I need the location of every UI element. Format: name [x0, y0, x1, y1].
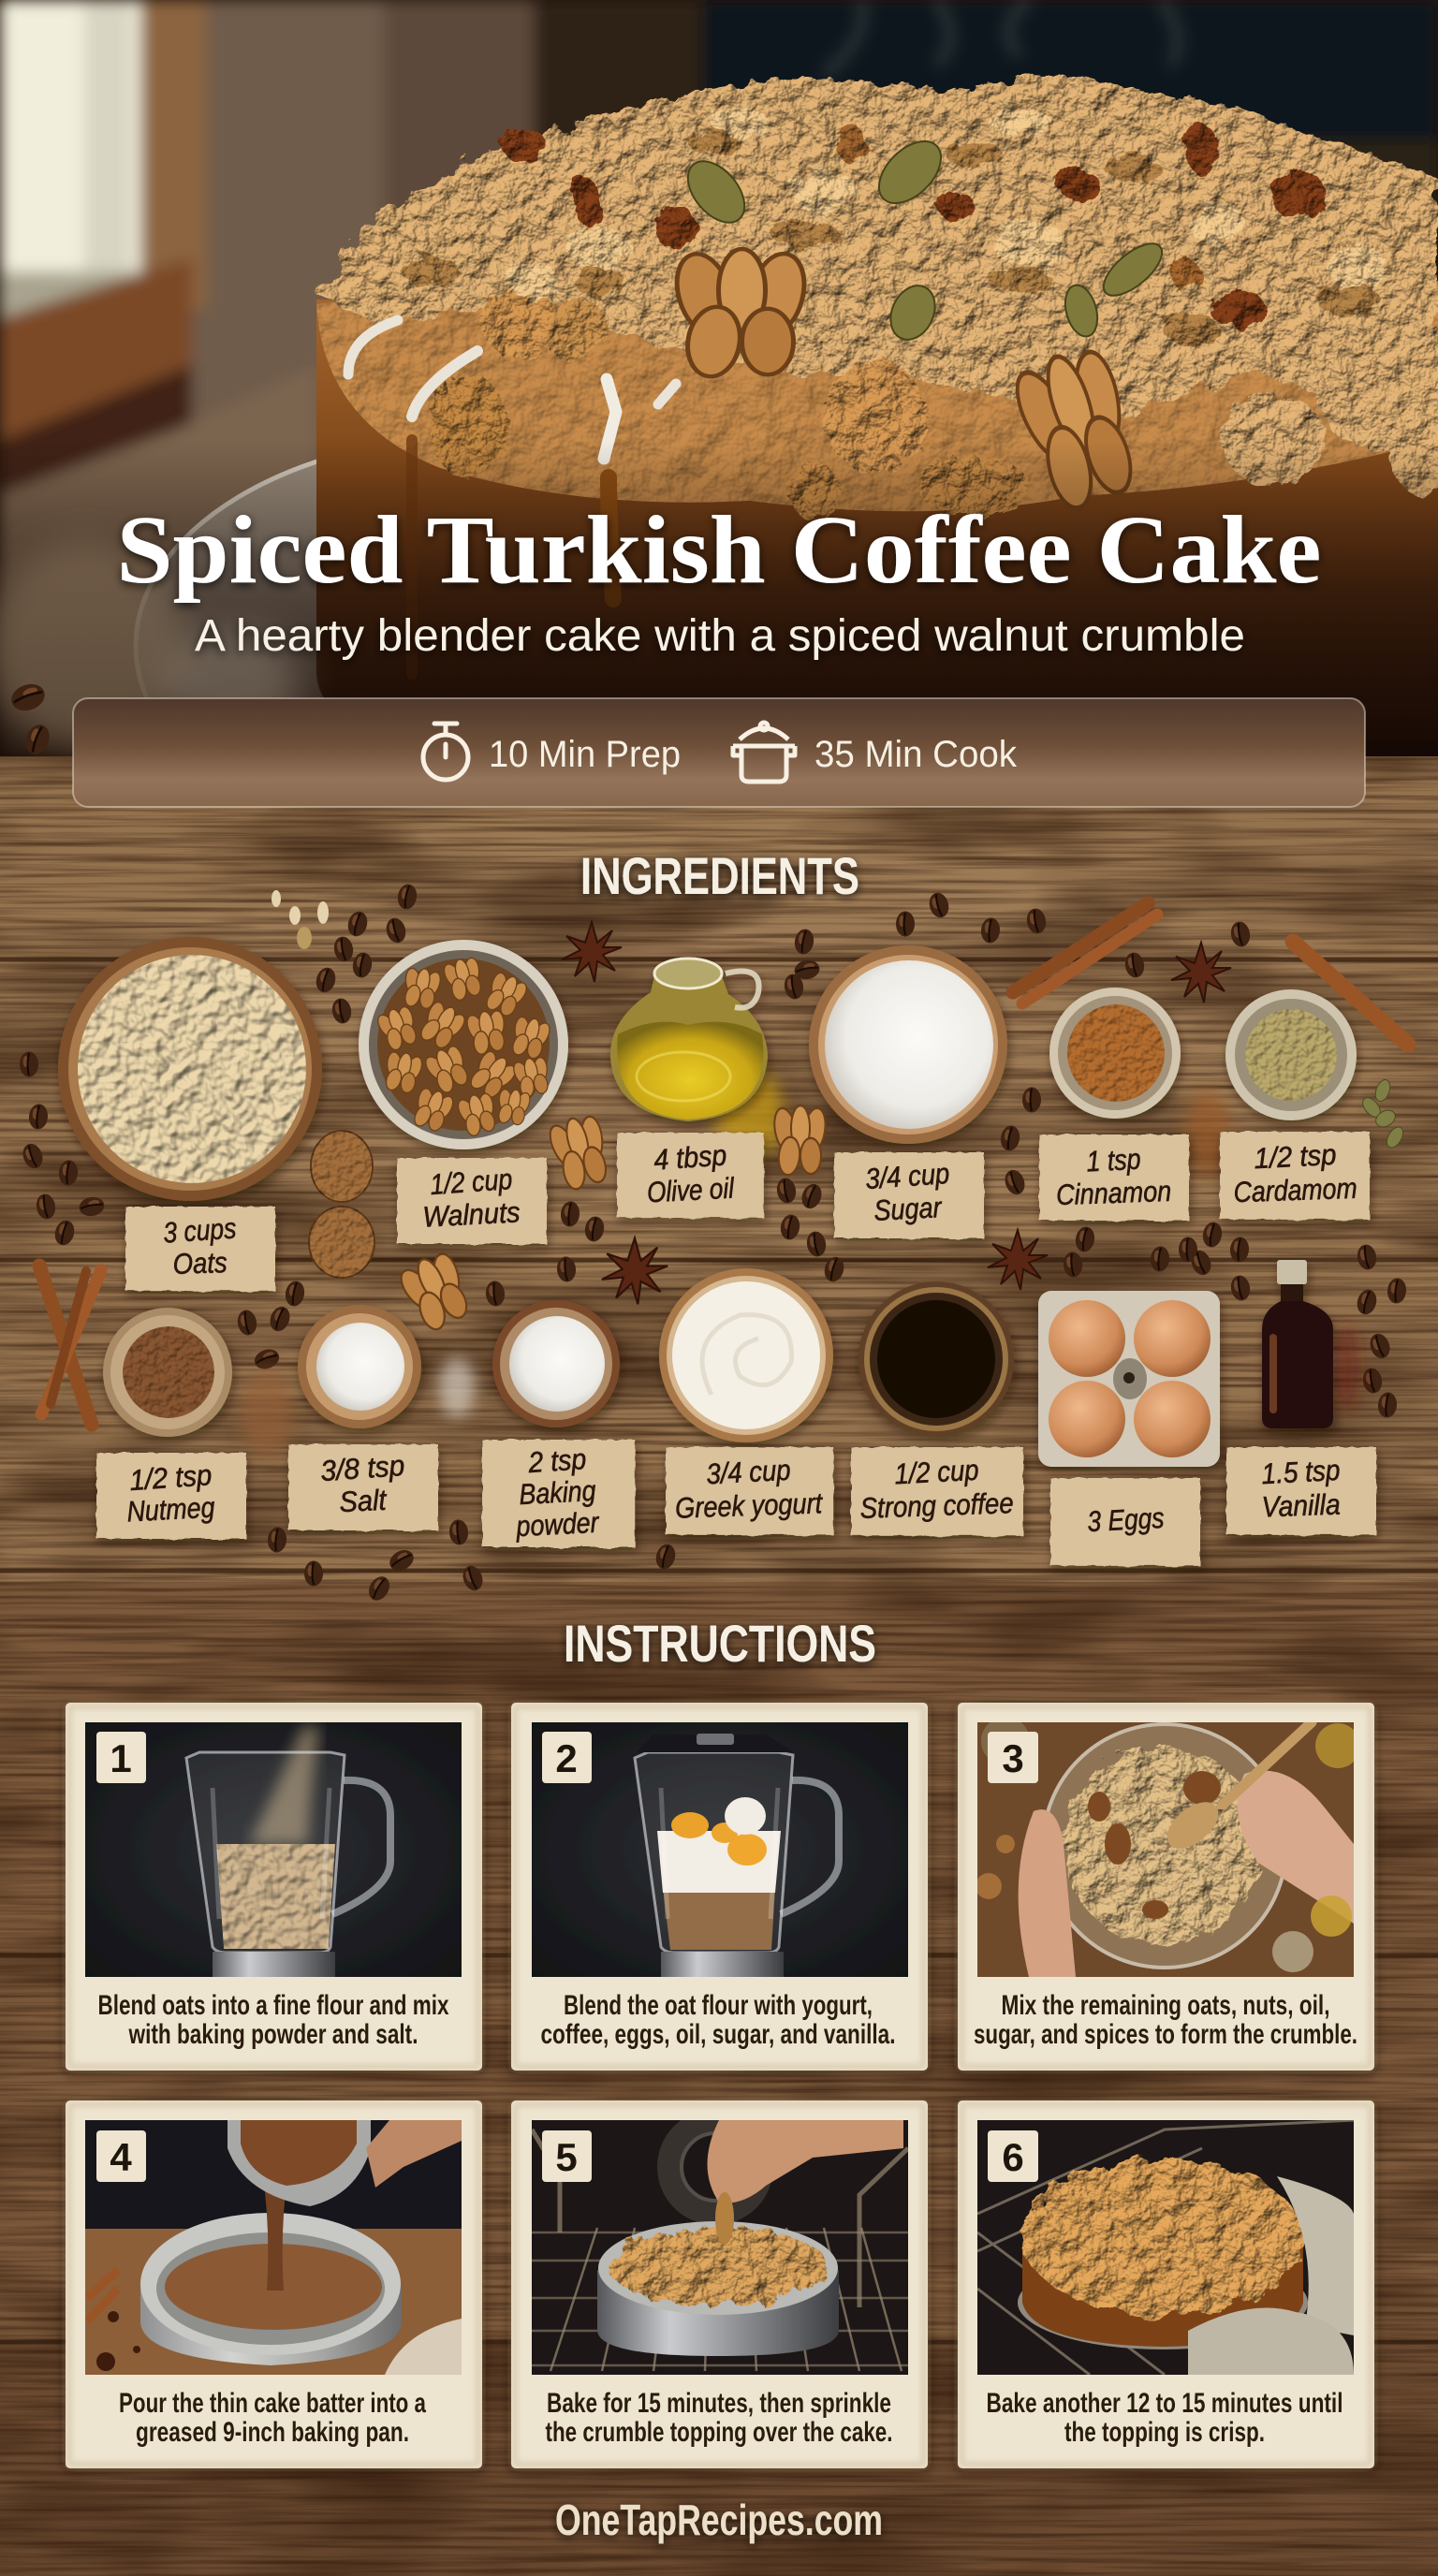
step 3 text: [974, 1990, 1357, 2050]
coffee beans on table: [7, 680, 53, 757]
cook time: 35 Min Cook: [814, 734, 1018, 775]
label: olive oil: 4 tbsp: [653, 1138, 727, 1177]
step 3 text: Mix the remaining oats, nuts, oil,: [1002, 1990, 1329, 2021]
whole walnuts: [309, 1131, 374, 1278]
step 5 text: [545, 2388, 893, 2448]
step 4 text: greased 9-inch baking pan.: [136, 2417, 409, 2448]
step 6 photo: finished cake from oven: [977, 2120, 1354, 2375]
label: cardamom: Cardamom: [1233, 1172, 1357, 1208]
bowl: oats: [58, 937, 322, 1201]
step 4 photo: pouring batter into pan: [85, 2120, 462, 2375]
step 6 text: the topping is crisp.: [1064, 2417, 1265, 2448]
label: walnuts: Walnuts: [422, 1195, 521, 1234]
label: 3 cups oats: [125, 1207, 275, 1291]
hero photo: spiced coffee cake: [0, 0, 1438, 756]
label: 3 cups oats: 3 cups: [162, 1211, 237, 1250]
label: greek yogurt: Greek yogurt: [675, 1486, 824, 1525]
step 1 badge: [96, 1732, 146, 1783]
label: sugar: [834, 1152, 984, 1238]
step 1 text: [97, 1990, 449, 2050]
step 2 text: [541, 1990, 895, 2050]
label: walnuts: [397, 1158, 547, 1244]
label: vanilla: [1226, 1447, 1376, 1535]
bottle: vanilla: [1262, 1260, 1333, 1428]
step 4 text: Pour the thin cake batter into a: [119, 2388, 426, 2419]
label: cinnamon: 1 tsp: [1086, 1143, 1141, 1178]
label: walnuts: 1/2 cup: [429, 1163, 513, 1201]
step 3 photo: mixing crumble in bowl: [977, 1722, 1354, 1977]
step 2 badge: 2: [555, 1736, 578, 1780]
plate: [133, 459, 324, 698]
label: baking powder: Baking: [519, 1474, 596, 1511]
step card 6: [958, 2100, 1374, 2468]
label: nutmeg: [96, 1453, 246, 1539]
label: salt: [288, 1444, 438, 1530]
steam: [824, 0, 1178, 75]
step 5 photo: sprinkling crumble in oven: [532, 2120, 908, 2375]
step 2 photo: wet ingredients in blender: [532, 1722, 908, 1977]
bowl: baking powder: [492, 1300, 620, 1427]
step 6 badge: [988, 2130, 1038, 2182]
cardamom pods: [677, 130, 1170, 346]
subtitle: A hearty blender cake with a spiced walnut crumble: [195, 611, 1245, 661]
table light: [0, 543, 300, 749]
icon: stopwatch: [423, 724, 468, 780]
label: baking powder: [482, 1440, 635, 1547]
step card 3: [958, 1703, 1374, 2071]
walnut pieces: [392, 1105, 829, 1338]
star anise: [562, 922, 1231, 1304]
label: cinnamon: Cinnamon: [1056, 1175, 1172, 1211]
step 1 badge: 1: [110, 1736, 132, 1780]
timing panel: [73, 698, 1365, 807]
step 2 badge: [542, 1732, 592, 1783]
step 1 photo: oats in blender: [85, 1722, 462, 1977]
crumble topping: [316, 71, 1438, 520]
step 4 text: [119, 2388, 426, 2448]
step 4 badge: 4: [110, 2135, 132, 2179]
bowl: salt: [298, 1305, 421, 1428]
label: sugar: 3/4 cup: [864, 1157, 950, 1195]
label: baking powder: 2 tsp: [526, 1442, 587, 1479]
step 1 text: Blend oats into a fine flour and mix: [97, 1990, 449, 2021]
label: strong coffee: 1/2 cup: [894, 1454, 979, 1490]
label: baking powder: powder: [515, 1506, 601, 1543]
step 2 text: Blend the oat flour with yogurt,: [564, 1990, 873, 2021]
cinnamon sticks: [39, 903, 1408, 1425]
bowl: sugar: [809, 945, 1007, 1144]
bowl: cinnamon: [1049, 988, 1181, 1119]
label: olive oil: [617, 1133, 764, 1218]
step 6 text: [987, 2388, 1343, 2448]
label: strong coffee: [851, 1447, 1023, 1536]
label: salt: 3/8 tsp: [319, 1449, 405, 1487]
footer brand: OneTapRecipes.com: [555, 2496, 883, 2544]
walnut halves on cake: [668, 249, 1154, 520]
title: Spiced Turkish Coffee Cake: [116, 496, 1322, 604]
label: strong coffee: Strong coffee: [859, 1486, 1014, 1525]
step card 5: [511, 2100, 928, 2468]
bowl: cardamom: [1225, 989, 1357, 1120]
step 6 badge: 6: [1002, 2135, 1024, 2179]
step card 4: [66, 2100, 482, 2468]
step 5 badge: [542, 2130, 592, 2182]
label: 3 cups oats: Oats: [172, 1246, 227, 1281]
heading: instructions: INSTRUCTIONS: [564, 1614, 876, 1673]
label: vanilla: 1.5 tsp: [1261, 1454, 1341, 1490]
tray: eggs: [1038, 1291, 1220, 1467]
label: cardamom: [1220, 1132, 1370, 1220]
prep time: 10 Min Prep: [489, 734, 681, 775]
label: cardamom: 1/2 tsp: [1254, 1138, 1337, 1175]
cake dome: [316, 281, 1438, 511]
jug: olive oil: [610, 959, 768, 1121]
spice dustings: [241, 1067, 1359, 1456]
label: salt: Salt: [339, 1484, 389, 1518]
label: greek yogurt: [666, 1447, 833, 1535]
step card 1: [66, 1703, 482, 2071]
step card 2: [511, 1703, 928, 2071]
label: nutmeg: 1/2 tsp: [128, 1458, 213, 1497]
step 5 text: the crumble topping over the cake.: [545, 2417, 893, 2448]
step 1 text: with baking powder and salt.: [128, 2019, 418, 2050]
step 3 badge: [988, 1732, 1038, 1783]
step 5 badge: 5: [555, 2135, 578, 2179]
cup: strong coffee: [858, 1281, 1014, 1437]
scattered coffee beans: [20, 883, 1407, 1604]
step 4 badge: [96, 2130, 146, 2182]
bowl: nutmeg: [103, 1308, 232, 1437]
step 3 badge: 3: [1002, 1736, 1024, 1780]
label: 3 eggs: 3 Eggs: [1087, 1501, 1165, 1538]
label: cinnamon: [1039, 1134, 1189, 1221]
label: sugar: Sugar: [873, 1191, 944, 1227]
label: nutmeg: Nutmeg: [126, 1491, 215, 1528]
icon: pot: [733, 723, 795, 782]
label: olive oil: Olive oil: [646, 1172, 736, 1208]
bowl: walnuts: [359, 940, 568, 1149]
glaze drips: [348, 320, 676, 674]
cake body: [316, 300, 1438, 739]
cardamom pods: [1359, 1077, 1406, 1150]
oat flakes: [271, 890, 329, 949]
label: greek yogurt: 3/4 cup: [706, 1454, 791, 1490]
step 2 text: coffee, eggs, oil, sugar, and vanilla.: [541, 2019, 895, 2050]
step 5 text: Bake for 15 minutes, then sprinkle: [547, 2388, 891, 2419]
label: vanilla: Vanilla: [1261, 1488, 1341, 1523]
bowl: greek yogurt: [659, 1268, 833, 1442]
heading: ingredients: INGREDIENTS: [580, 846, 859, 905]
label: 3 eggs: [1050, 1478, 1200, 1566]
